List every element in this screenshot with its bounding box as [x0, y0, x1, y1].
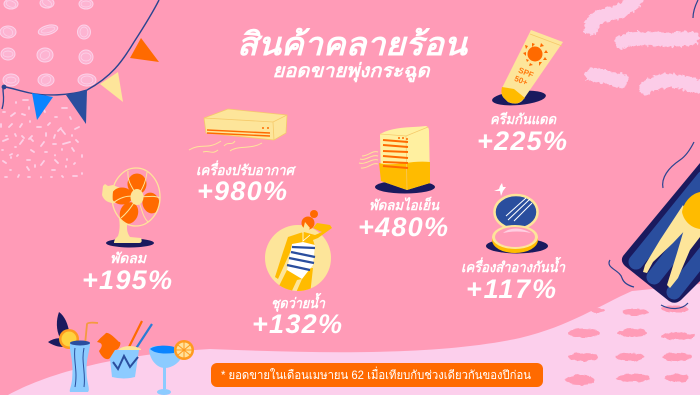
label: swimsuit: ชุดว่ายน้ำ [271, 292, 326, 312]
label: air cooler: +480% [358, 212, 448, 242]
pink blotches on ground [565, 306, 695, 385]
label: compact [461, 256, 566, 304]
label: air cooler: พัดลมไอเย็น [369, 196, 440, 213]
icon: compact [486, 183, 548, 254]
confetti pattern [1, 100, 82, 178]
label: air conditioner [196, 160, 297, 206]
icon: air mattress with sunbather [622, 163, 700, 303]
label: fan: พัดลม [110, 250, 148, 266]
bunting flags [32, 38, 159, 124]
label: air cooler [358, 196, 448, 242]
label: air conditioner: +980% [197, 176, 287, 206]
label: swimsuit [252, 292, 342, 339]
icon: swimsuit [265, 210, 332, 295]
icon: fan [102, 168, 162, 248]
icon: sunscreen: SPF [517, 66, 535, 80]
icon: tall cocktail [48, 312, 98, 392]
label: sunscreen: ครีมกันแดด [490, 111, 557, 127]
label: sunscreen: +225% [477, 126, 567, 156]
footer note: * ยอดขายในเดือนเมษายน 62 เมื่อเทียบกับช่วงเดียวกันของปีก่อน [221, 366, 531, 382]
label: fan: +195% [82, 265, 172, 295]
light pink ground [8, 284, 700, 395]
icon: sunscreen: 50+ [513, 74, 529, 88]
icon: air conditioner [189, 109, 287, 152]
icon: air cooler [359, 126, 435, 194]
scribble pattern top left [0, 0, 96, 86]
label: swimsuit: +132% [252, 309, 342, 339]
label: air conditioner: เครื่องปรับอากาศ [196, 160, 297, 178]
title: ยอดขายพุ่งกระฉูด [272, 61, 431, 83]
water ripples [609, 0, 698, 309]
title [237, 26, 468, 83]
label: sunscreen [477, 111, 567, 156]
label: compact: เครื่องสำอางกันน้ำ [461, 256, 566, 275]
title: สินค้าคลายร้อน [237, 26, 468, 62]
icon: blue cocktail [97, 321, 152, 378]
brush strokes top right [591, 0, 700, 88]
label: compact: +117% [466, 274, 556, 304]
label: fan [82, 250, 172, 295]
footer note [211, 363, 543, 387]
bunting string [5, 0, 159, 95]
icon: sunscreen [491, 30, 563, 107]
icon: martini glass [149, 340, 194, 395]
